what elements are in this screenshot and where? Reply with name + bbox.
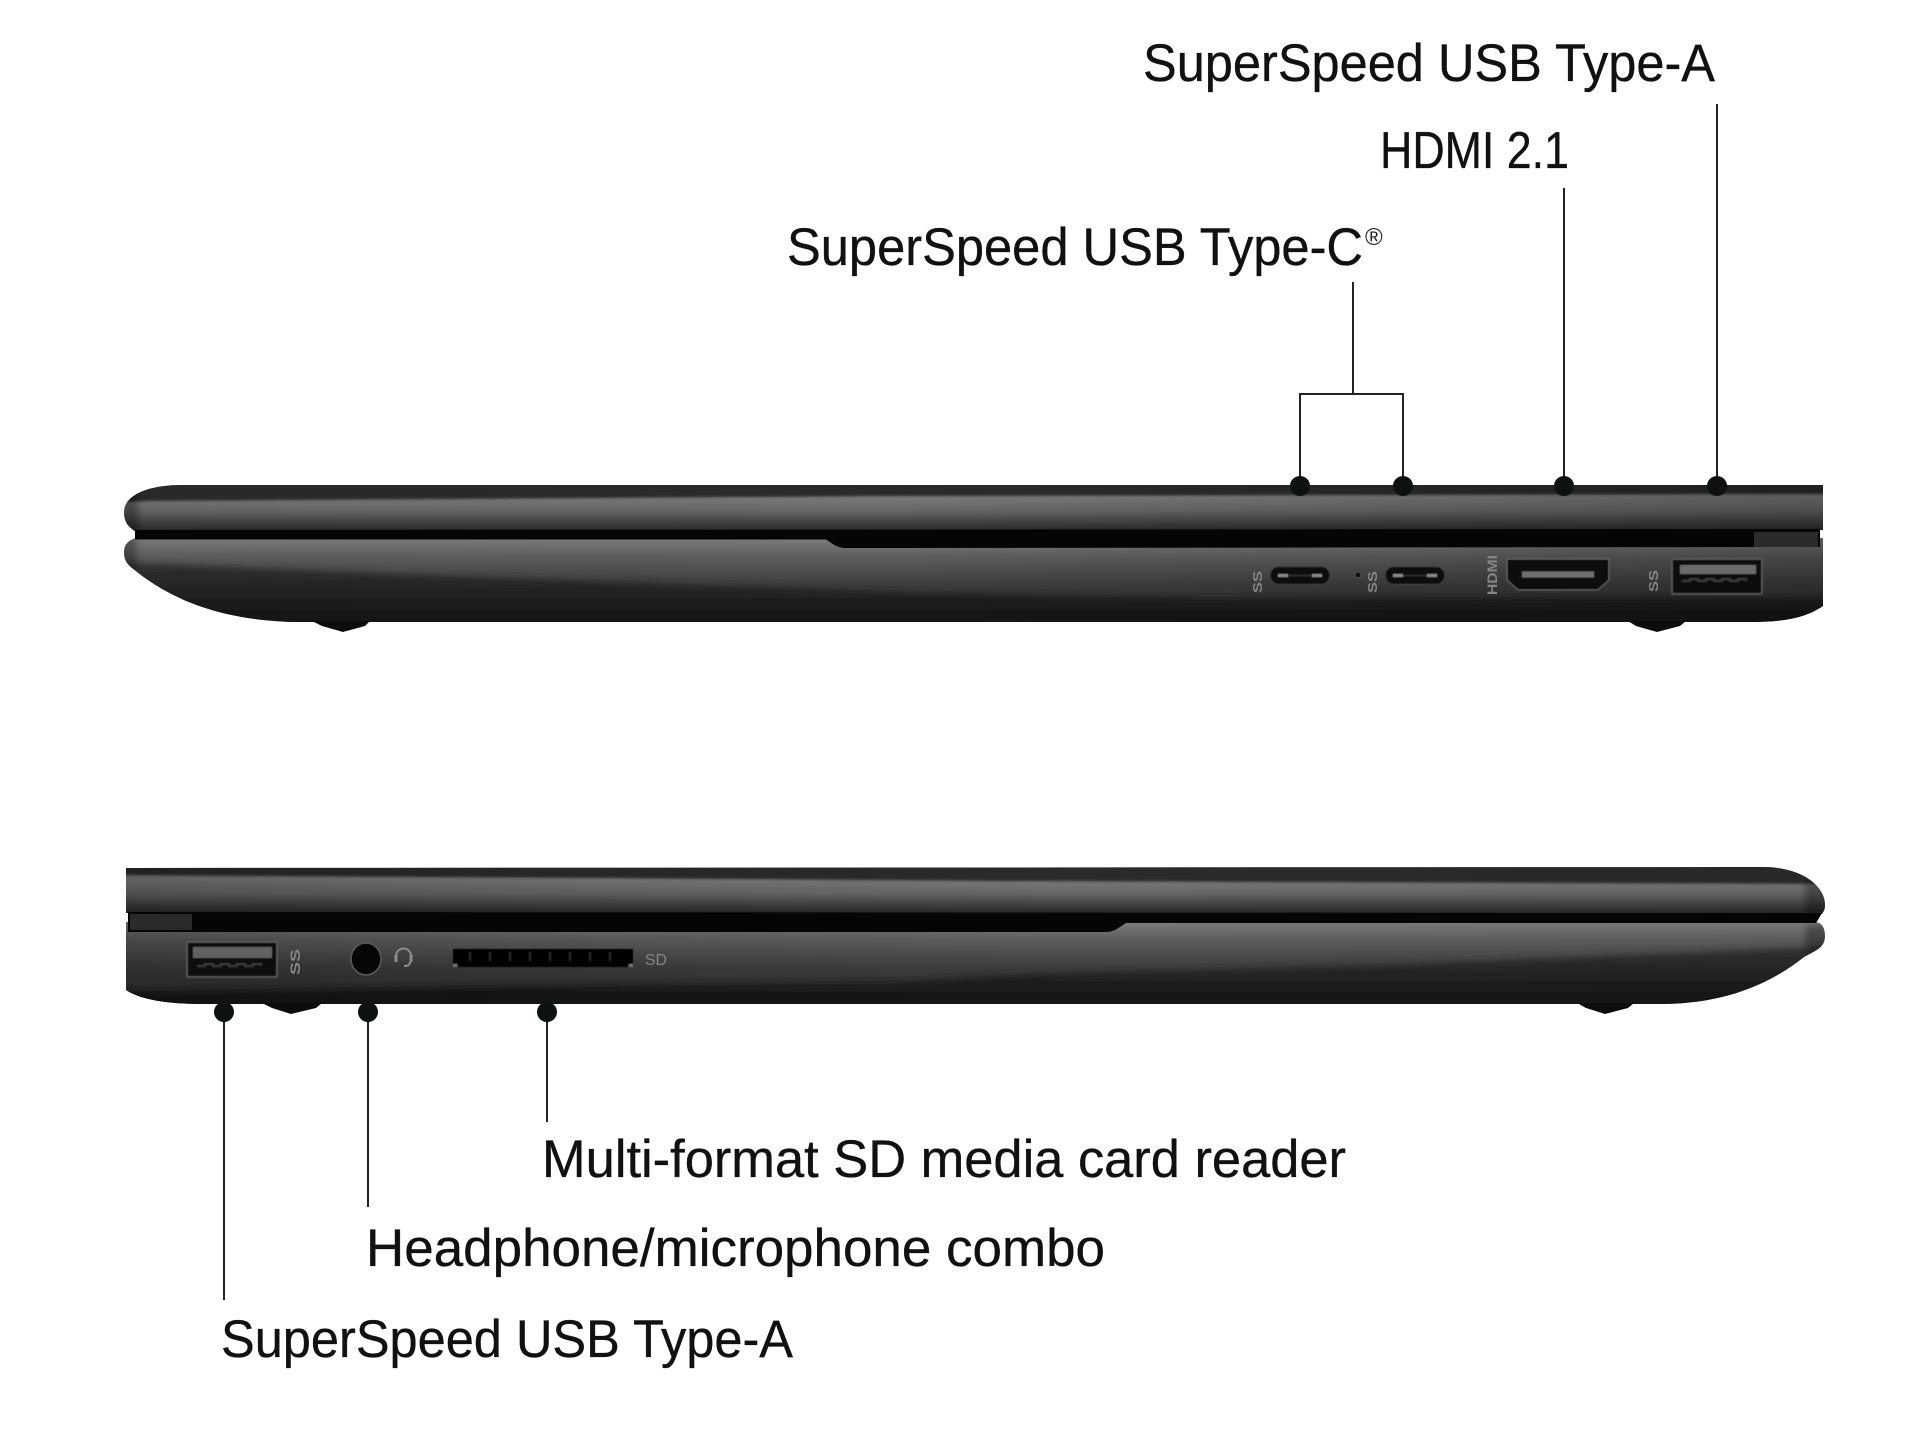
callout: Multi-format SD media card reader <box>537 1002 1346 1189</box>
rubber foot right <box>1577 1003 1634 1014</box>
port label: SS Type-C 1: SS <box>1250 571 1265 593</box>
laptop lid (left side) <box>126 867 1825 914</box>
laptop lid (right side) <box>124 485 1823 532</box>
port: SuperSpeed USB Type-C 1 <box>1270 566 1330 584</box>
port label: SS Type-C 2: SS <box>1365 571 1380 593</box>
port: headphone jack <box>351 943 381 975</box>
laptop base (left side) <box>126 922 1825 1004</box>
callout: Headphone/microphone combo: Headphone/microphone combo <box>366 1219 1105 1278</box>
rubber foot right <box>1628 621 1686 632</box>
hinge gap with black slot (left side) <box>128 912 1822 932</box>
callout: Multi-format SD media card reader: Multi-format SD media card reader <box>542 1130 1346 1189</box>
laptop: right side view <box>124 485 1823 632</box>
port: HDMI <box>1507 559 1609 590</box>
port: SD card slot <box>453 949 633 967</box>
callout: SuperSpeed USB Type-A (top): SuperSpeed USB Type-A <box>1143 34 1716 93</box>
laptop base (right side) <box>124 538 1823 622</box>
port label: SD: SD <box>645 952 667 969</box>
port: USB Type-A <box>1672 559 1762 594</box>
callout: HDMI 2.1: HDMI 2.1 <box>1380 122 1569 180</box>
rubber foot left <box>262 1003 322 1014</box>
port label: SS Type-A: SS <box>287 949 303 975</box>
callout: HDMI 2.1 <box>1380 122 1574 496</box>
callout: Headphone/microphone combo <box>358 1002 1105 1278</box>
port: USB Type-A <box>187 942 277 977</box>
callout: SuperSpeed USB Type-A (top) <box>1143 34 1727 496</box>
icon: headphones <box>394 949 412 966</box>
hinge gap with black slot (right side) <box>135 529 1820 548</box>
callout: SuperSpeed USB Type-A (bottom) <box>214 1002 794 1369</box>
port label: SS Type-A: SS <box>1646 570 1661 592</box>
port: SuperSpeed USB Type-C 2 <box>1385 566 1445 584</box>
hinge block <box>1754 532 1818 547</box>
hinge block <box>130 914 192 930</box>
rubber foot left <box>312 621 370 632</box>
laptop: left side view <box>126 867 1825 1014</box>
callout: SuperSpeed USB Type-A (bottom): SuperSpeed USB Type-A <box>221 1310 794 1369</box>
callout: SuperSpeed USB Type-C: ® <box>1365 224 1383 251</box>
callout: SuperSpeed USB Type-C <box>787 218 1413 496</box>
status LED <box>1355 572 1361 578</box>
callout: SuperSpeed USB Type-C: SuperSpeed USB Type-C <box>787 218 1363 277</box>
port label: HDMI: HDMI <box>1484 555 1500 595</box>
